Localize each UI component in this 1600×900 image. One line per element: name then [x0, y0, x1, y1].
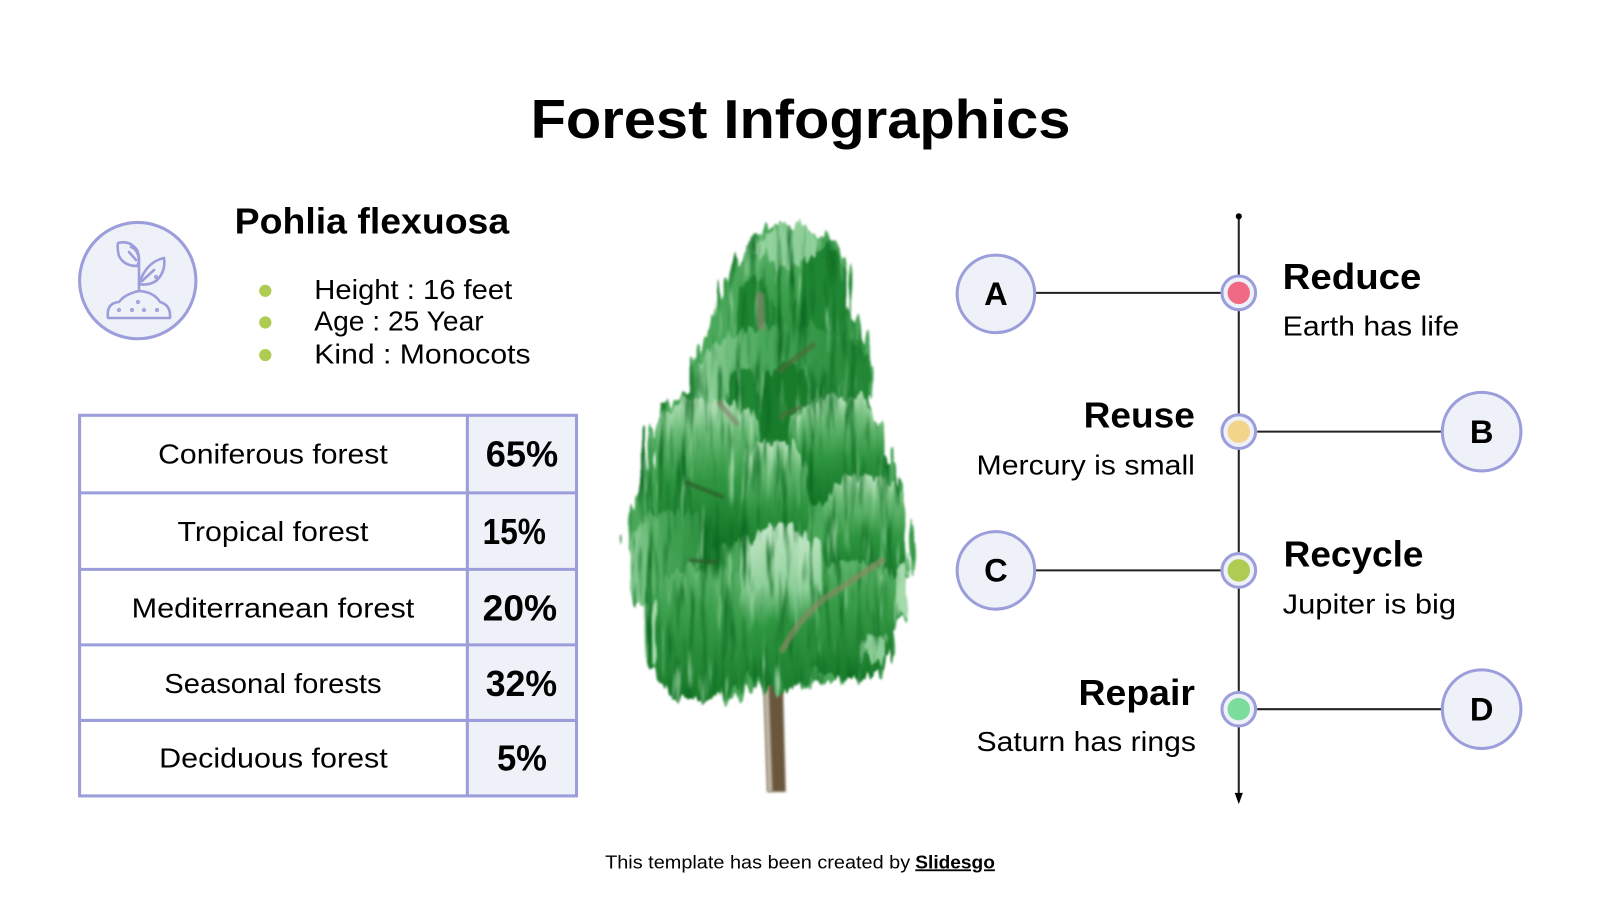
step: Reduce: A	[984, 275, 1008, 312]
table: forest types: 15%	[483, 512, 546, 552]
step: Recycle: Recycle	[1284, 534, 1423, 574]
species name: Pohlia flexuosa	[235, 202, 510, 242]
step: Reduce: Earth has life	[1283, 311, 1459, 342]
step: Repair: D	[1470, 690, 1493, 727]
step: Reuse	[977, 392, 1521, 480]
timeline axis	[1235, 213, 1243, 804]
table: forest types	[80, 415, 577, 796]
bullet list	[259, 274, 531, 369]
table: forest types: 65%	[486, 434, 558, 474]
table: forest types: Deciduous forest	[159, 742, 388, 773]
table: forest types: 20%	[483, 588, 557, 628]
table: forest types: Coniferous forest	[158, 438, 388, 469]
connector lines	[1035, 293, 1443, 709]
table: forest types: Mediterranean forest	[132, 592, 415, 623]
table: forest types: 32%	[486, 664, 557, 704]
step: Repair: Saturn has rings	[977, 726, 1196, 757]
tree canopy lobes	[624, 224, 909, 702]
branches	[687, 296, 883, 650]
step: Reuse: Mercury is small	[977, 449, 1195, 480]
step: Reuse: B	[1470, 413, 1493, 450]
bullet list: Kind : Monocots	[314, 338, 531, 369]
title: Forest Infographics	[531, 88, 1070, 150]
step: Reduce: Reduce	[1283, 257, 1421, 297]
step: Recycle	[957, 532, 1456, 619]
table: forest types: 5%	[497, 738, 547, 778]
step: Recycle: C	[984, 552, 1008, 589]
step: Reuse: Reuse	[1084, 396, 1195, 436]
footer credit: This template has been created by	[605, 851, 911, 872]
tree trunk	[763, 673, 786, 792]
footer credit: Slidesgo	[915, 851, 995, 872]
diagram: timeline	[957, 213, 1521, 804]
bullet list: Age : 25 Year	[314, 306, 484, 337]
panel: species profile	[80, 202, 531, 369]
step: Repair	[977, 670, 1521, 757]
step: Reduce	[957, 255, 1459, 342]
table: forest types: Tropical forest	[178, 516, 369, 547]
bullet list: Height : 16 feet	[314, 274, 513, 305]
step: Repair: Repair	[1079, 673, 1195, 713]
icon: sprout in circle	[80, 222, 196, 339]
step: Recycle: Jupiter is big	[1283, 588, 1456, 619]
table: forest types: Seasonal forests	[164, 668, 382, 699]
illustration: watercolor tree	[624, 224, 909, 792]
